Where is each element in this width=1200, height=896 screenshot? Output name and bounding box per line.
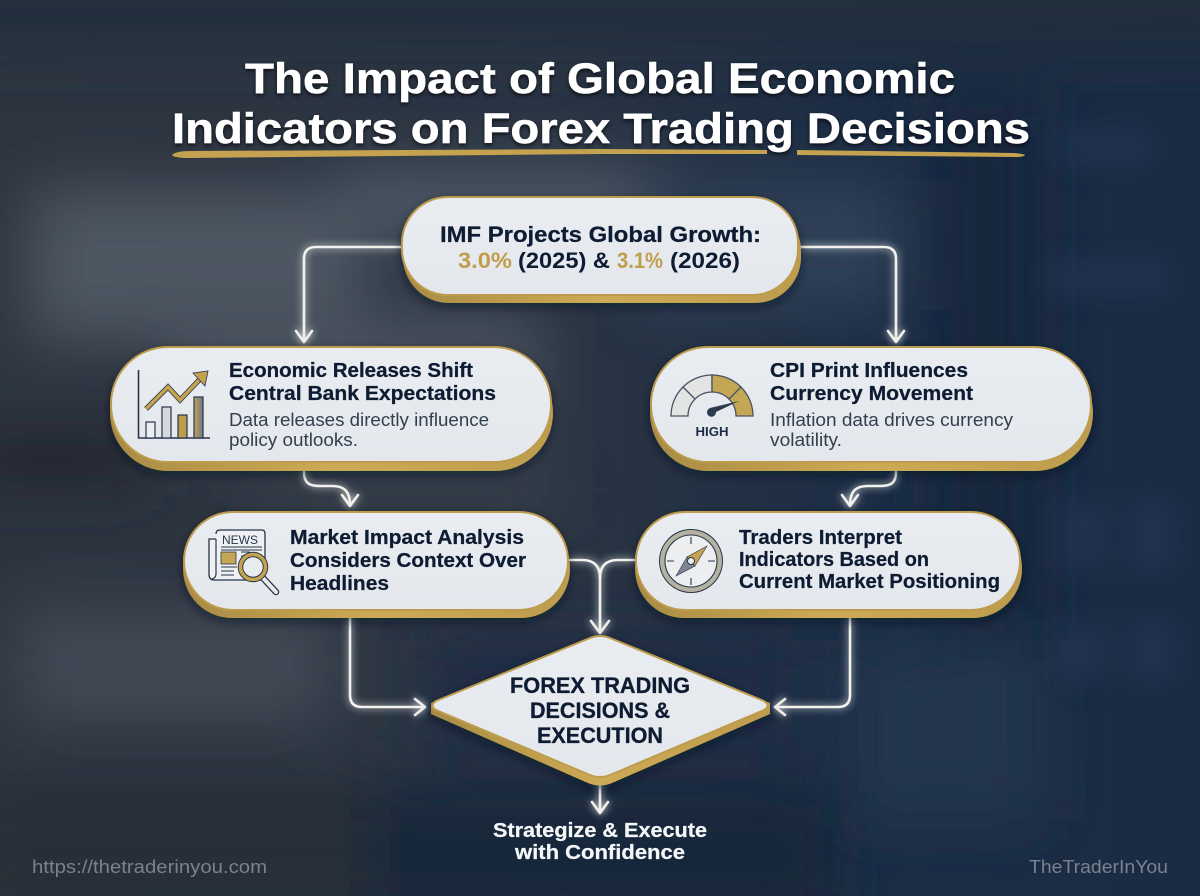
economic releases heading	[229, 360, 496, 405]
traders heading	[739, 527, 1000, 593]
closing message: Strategize & Execute	[493, 820, 707, 842]
traders heading: Current Market Positioning	[739, 571, 1000, 593]
diamond label: DECISIONS &	[530, 698, 670, 723]
arrow: top pill to right release pill	[801, 247, 904, 342]
icon: high gauge: HIGH	[696, 424, 728, 439]
CPI heading: Currency Movement	[770, 383, 973, 405]
market impact heading	[290, 527, 526, 595]
economic releases heading: Economic Releases Shift	[229, 360, 473, 382]
panel: economic releases	[110, 347, 553, 471]
icon: bar chart with rising arrow	[138, 370, 210, 438]
IMF growth figures: 3.1%	[617, 248, 663, 273]
IMF growth figures: 3.0%	[458, 248, 512, 273]
market impact heading: Considers Context Over	[290, 550, 526, 572]
arrow: merged centre branches into diamond	[570, 560, 635, 633]
economic releases description	[229, 410, 489, 450]
diamond label: EXECUTION	[537, 723, 663, 748]
IMF heading: IMF Projects Global Growth:	[440, 222, 761, 247]
arrow: top pill to left release pill	[296, 247, 402, 342]
panel: CPI print	[650, 347, 1093, 471]
title	[172, 55, 1030, 153]
arrow: economic releases to market impact	[304, 472, 358, 506]
market impact heading: Market Impact Analysis	[290, 527, 524, 549]
economic releases heading: Central Bank Expectations	[229, 383, 496, 405]
CPI description: volatility.	[770, 430, 842, 450]
CPI description: Inflation data drives currency	[770, 410, 1013, 430]
diamond label: FOREX TRADING	[510, 673, 690, 698]
title underline	[172, 149, 1025, 158]
closing message	[493, 820, 707, 864]
connector arrows	[296, 247, 904, 813]
footer brand: TheTraderInYou	[1029, 857, 1168, 877]
economic releases description: policy outlooks.	[229, 430, 358, 450]
IMF growth figures: (2025) &	[518, 248, 610, 273]
arrow: CPI to traders	[842, 472, 896, 506]
arrow: diamond to closing message	[592, 780, 608, 813]
panel: market impact analysis	[183, 512, 570, 618]
economic releases description: Data releases directly influence	[229, 410, 489, 430]
CPI description	[770, 410, 1013, 450]
panel: traders interpret	[635, 512, 1022, 618]
arrow: traders to diamond	[775, 618, 850, 715]
diamond label	[510, 673, 690, 748]
title: Indicators on Forex Trading Decisions	[172, 105, 1030, 153]
CPI heading: CPI Print Influences	[770, 360, 968, 382]
icon: newspaper and magnifier: NEWS	[222, 535, 258, 547]
IMF growth figures: (2026)	[670, 248, 740, 273]
panel: IMF projection	[402, 197, 801, 303]
traders heading: Indicators Based on	[739, 549, 929, 571]
icon: high gauge	[671, 375, 753, 439]
title: The Impact of Global Economic	[245, 55, 955, 103]
arrow: market impact to diamond	[350, 618, 425, 715]
panel: forex trading decisions diamond	[431, 636, 770, 786]
closing message: with Confidence	[514, 842, 685, 864]
IMF growth figures	[458, 248, 740, 273]
traders heading: Traders Interpret	[739, 527, 902, 549]
icon: compass	[659, 529, 723, 593]
footer url: https://thetraderinyou.com	[32, 857, 267, 877]
CPI heading	[770, 360, 973, 405]
icon: newspaper and magnifier	[209, 530, 276, 592]
market impact heading: Headlines	[290, 573, 389, 595]
